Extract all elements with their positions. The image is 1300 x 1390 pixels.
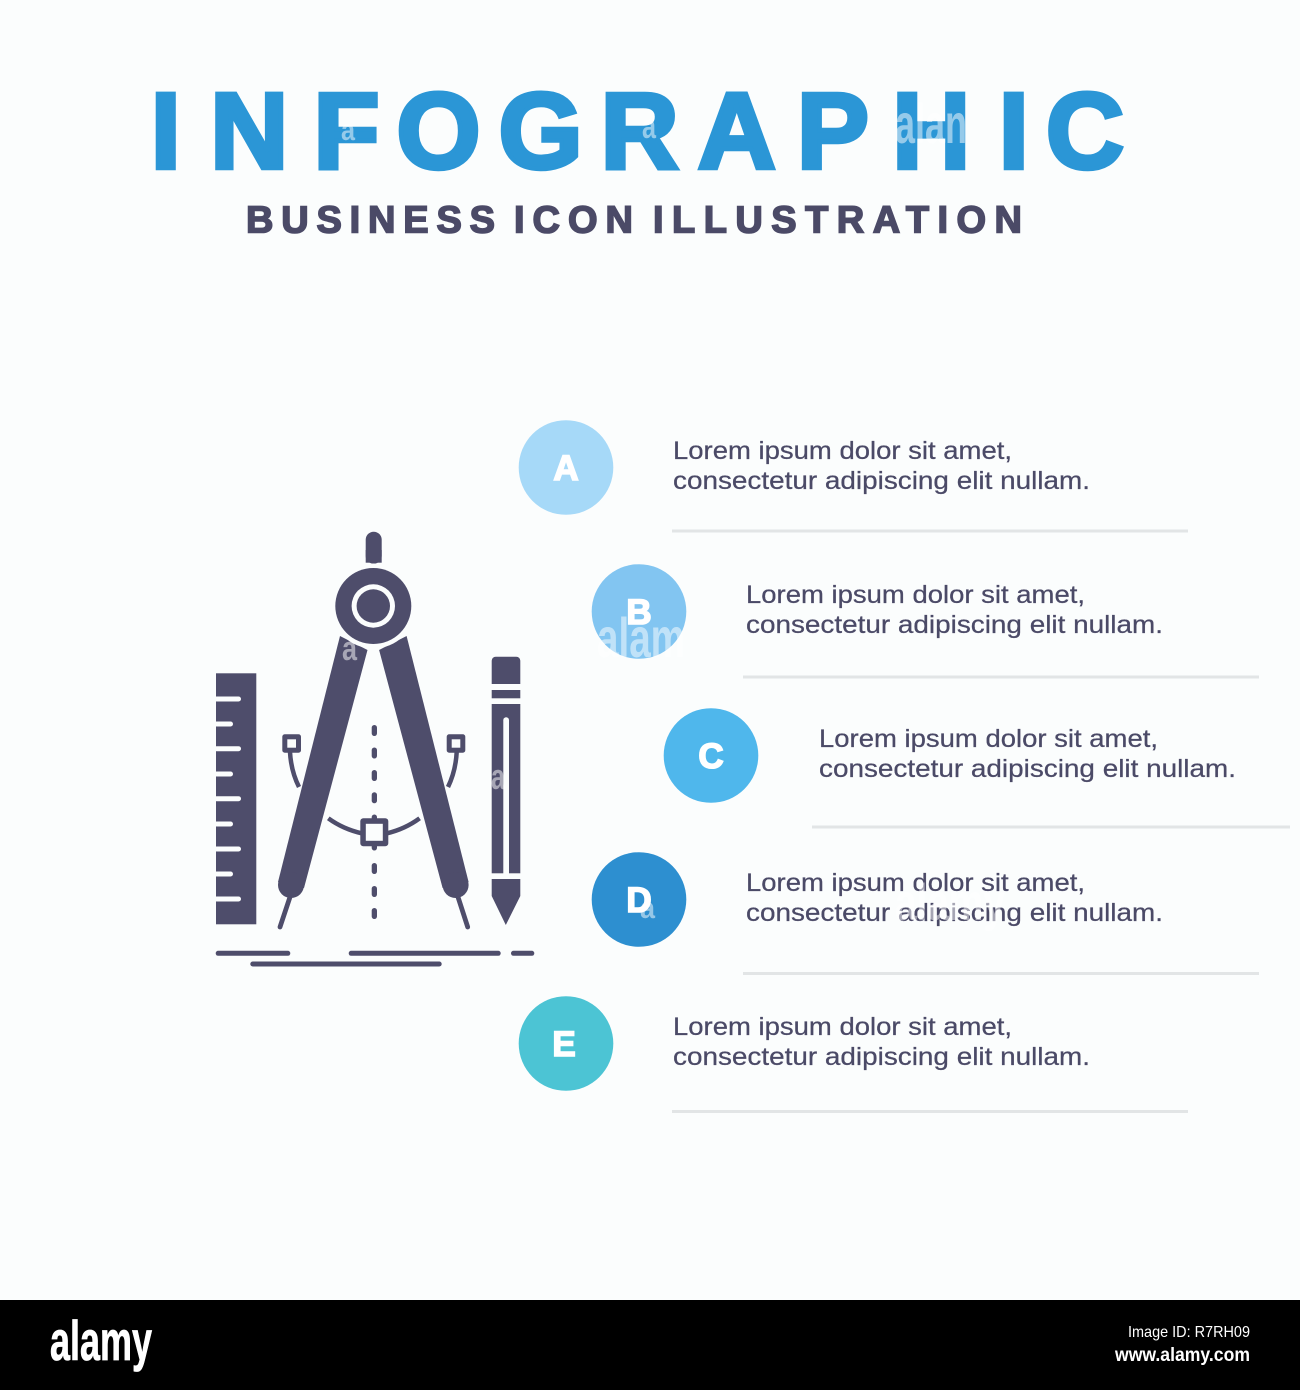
- badge A: [519, 420, 613, 515]
- badge C: [664, 708, 758, 803]
- step C: [664, 708, 1290, 828]
- pencil: [492, 657, 520, 925]
- badge E: E: [552, 1025, 576, 1064]
- badge B: [592, 564, 686, 659]
- website: www.alamy.com: [1114, 1345, 1250, 1366]
- dashed centre line: [372, 725, 377, 919]
- badge C: C: [698, 737, 724, 776]
- text A: Lorem ipsum dolor sit amet,: [673, 437, 1012, 465]
- watermarks: alamy: [895, 874, 1005, 932]
- badge A: A: [553, 449, 579, 488]
- badge D: [592, 852, 686, 947]
- watermarks: a: [642, 108, 657, 146]
- watermarks: a: [341, 114, 355, 147]
- badge D: D: [626, 881, 652, 920]
- angle arc with handle: [328, 818, 420, 846]
- icon: compass, ruler and pencil: [214, 532, 534, 966]
- text B: Lorem ipsum dolor sit amet,: [746, 581, 1085, 609]
- step D: [592, 852, 1259, 975]
- text C: consectetur adipiscing elit nullam.: [819, 755, 1236, 783]
- watermarks: a: [640, 892, 655, 925]
- text A: consectetur adipiscing elit nullam.: [673, 467, 1090, 495]
- ruler: [214, 673, 256, 924]
- watermarks: alan: [895, 92, 967, 155]
- text D: Lorem ipsum dolor sit amet,: [746, 869, 1085, 897]
- subtitle: BUSINESS: [246, 200, 495, 242]
- step B: [592, 564, 1259, 678]
- badge E: [519, 996, 613, 1091]
- subtitle: ILLUSTRATION: [653, 200, 1022, 242]
- ground lines: [216, 951, 534, 966]
- compass: [278, 532, 469, 927]
- text C: Lorem ipsum dolor sit amet,: [819, 725, 1158, 753]
- subtitle: ICON: [514, 200, 633, 242]
- title: INFOGRAPHIC: [151, 70, 1124, 191]
- left bezier handle: [282, 734, 301, 787]
- image id: Image ID: R7RH09: [1128, 1324, 1250, 1341]
- step A: [519, 420, 1188, 532]
- right bezier handle: [447, 734, 465, 787]
- text E: Lorem ipsum dolor sit amet,: [673, 1013, 1012, 1041]
- footer bar: [0, 1300, 1300, 1390]
- watermarks: alam: [597, 606, 685, 669]
- step E: [519, 996, 1188, 1113]
- footer logo: alamy: [50, 1309, 152, 1372]
- text B: consectetur adipiscing elit nullam.: [746, 611, 1163, 639]
- text D: consectetur adipiscing elit nullam.: [746, 899, 1163, 927]
- watermarks: a: [491, 756, 506, 797]
- text E: consectetur adipiscing elit nullam.: [673, 1043, 1090, 1071]
- watermarks: [341, 92, 1005, 932]
- watermarks: a: [342, 630, 358, 668]
- badge B: B: [626, 593, 652, 632]
